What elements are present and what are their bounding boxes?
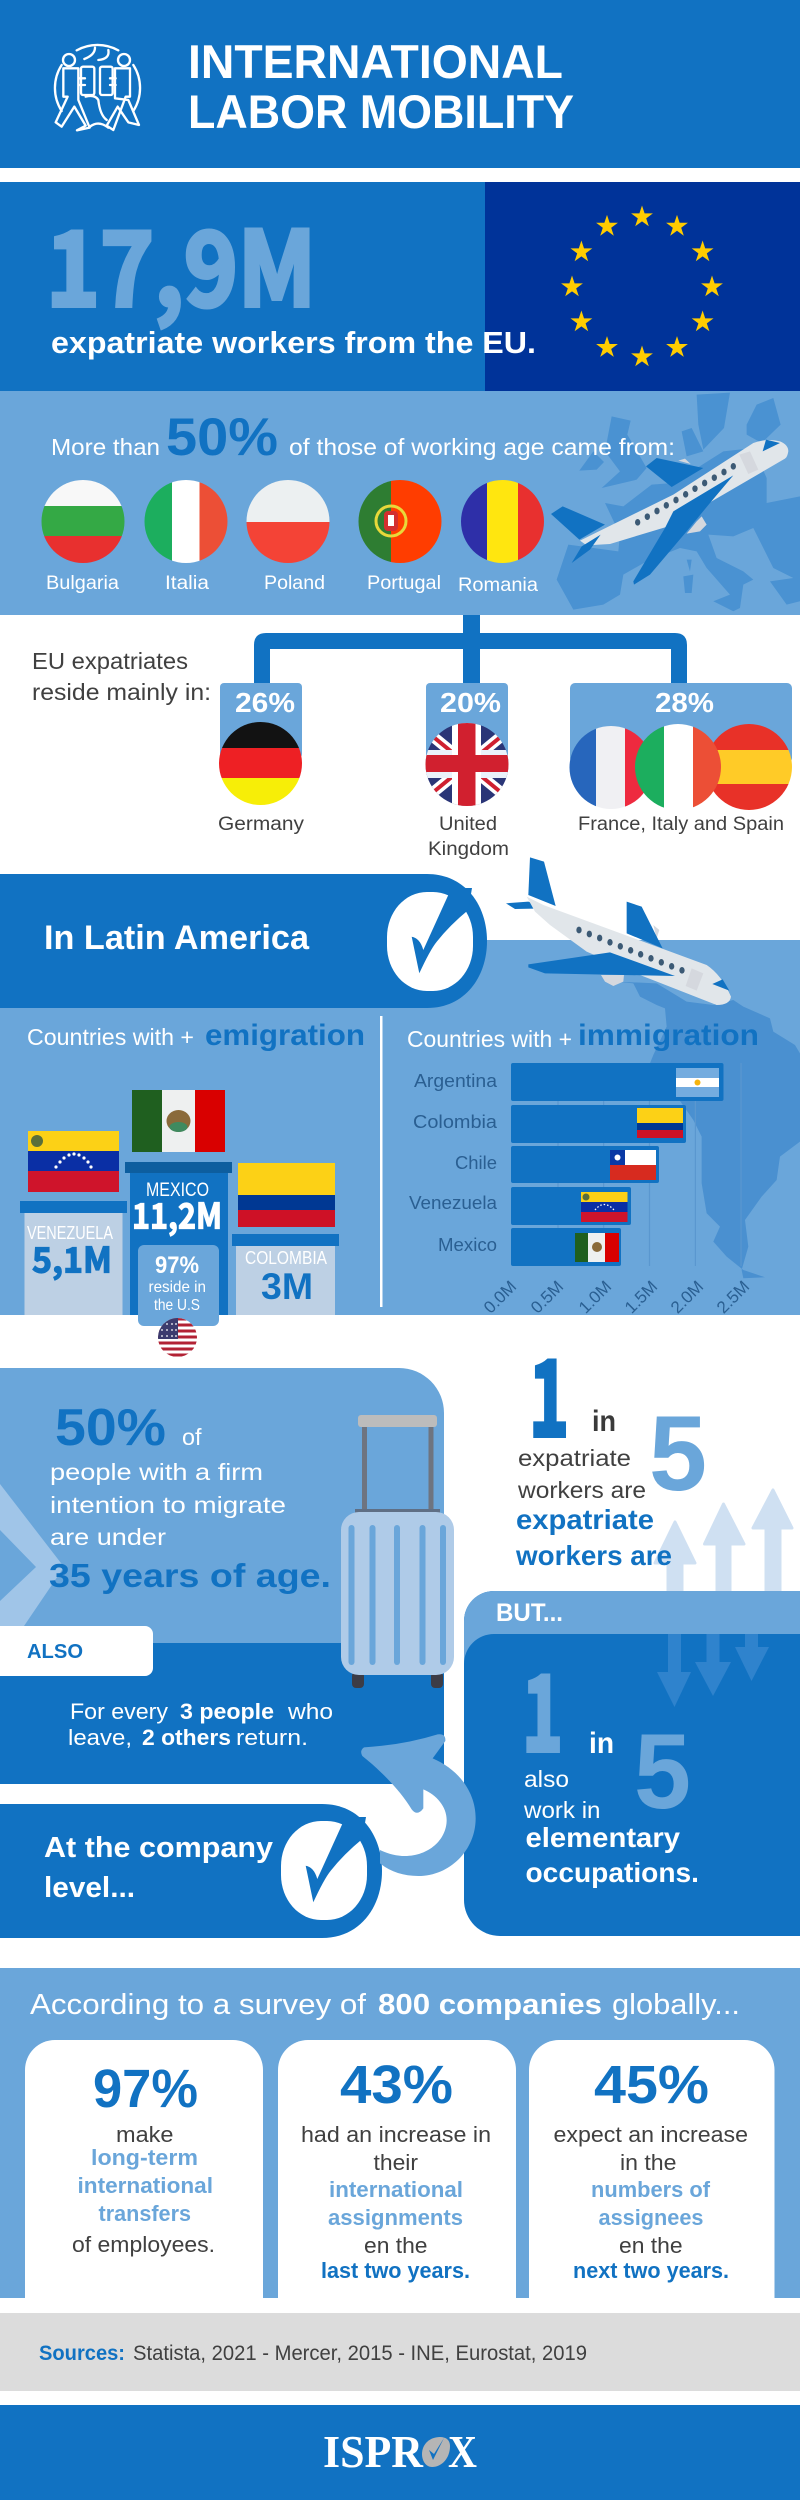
podium: Mexico: [125, 1090, 232, 1359]
icon: airplane taking off: [551, 440, 788, 585]
Germany 26%: 26%: [235, 687, 295, 718]
podium: Mexico: 11,2M: [132, 1188, 222, 1240]
country labels: Poland: [264, 573, 325, 594]
heading: immigration: Countries with +: [407, 1026, 572, 1052]
card: 97%: make: [116, 2122, 174, 2147]
Germany 26%: Germany: [218, 814, 305, 835]
icon: check mark: [387, 888, 473, 991]
icon: suitcase: [341, 1415, 454, 1688]
flag: Romania: [460, 480, 545, 564]
bar labels: Argentina: [414, 1071, 498, 1091]
card: 97%: international: [78, 2173, 213, 2198]
axis labels: 0.5M: [527, 1277, 567, 1317]
survey heading: According to a survey of: [30, 1989, 367, 2021]
card: 45%: expect an increase: [554, 2122, 748, 2147]
flag: Portugal: [358, 480, 443, 564]
text: every 3 people: return.: [236, 1725, 308, 1750]
stat: 1 in 5 expatriate workers: expatriate: [516, 1504, 654, 1535]
axis labels: 1.5M: [621, 1277, 661, 1317]
flag: Bulgaria: [41, 480, 125, 564]
podium: Mexico: 97%: [155, 1252, 199, 1279]
text: 50% of people: intention to migrate: [50, 1492, 286, 1518]
text: 50% of people: people with a firm: [50, 1459, 263, 1485]
text: every 3 people: For every: [70, 1699, 168, 1724]
survey heading: [30, 1989, 740, 2021]
title: LABOR MOBILITY: [188, 85, 574, 138]
icon: check mark: [281, 1817, 367, 1920]
card: 97%: transfers: [98, 2201, 191, 2226]
footer with logo: [0, 2405, 800, 2500]
flag: Poland: [246, 480, 330, 564]
axis labels: 1.0M: [575, 1277, 615, 1317]
flag: United States: [158, 1318, 197, 1356]
intro sentence: [51, 408, 675, 467]
stat: 1 in 5 expatriate workers: 5: [649, 1393, 707, 1513]
heading: immigration: immigration: [578, 1019, 759, 1052]
heading: emigration: [27, 1019, 365, 1052]
bar labels: Venezuela: [409, 1193, 498, 1213]
banner: At the company level: At the company: [44, 1832, 273, 1864]
panel: EU expatriate headline: [0, 182, 800, 391]
sources bar: [0, 2313, 800, 2391]
podium: Colombia: 3M: [261, 1266, 313, 1307]
panel: Latin America: [0, 857, 800, 1359]
flag: Italy: [144, 480, 228, 564]
header panel: [0, 0, 800, 168]
France, Italy and Spain 28%: 28%: [655, 687, 714, 718]
France, Italy and Spain 28%: France, Italy and Spain: [578, 814, 784, 835]
icon: up arrows: [655, 1490, 792, 1592]
podium: Mexico: the U.S: [154, 1297, 200, 1314]
card: 45%: 45%: [594, 2055, 709, 2115]
card: 45%: in the: [620, 2150, 676, 2175]
podium: Colombia: COLOMBIA: [245, 1248, 327, 1268]
panel: BUT 1 in 5 elementary occupations: also: [524, 1766, 569, 1792]
bar chart: immigration: [409, 1063, 753, 1317]
country labels: [46, 573, 538, 596]
icon: two workers with globe: [55, 45, 140, 130]
text: every 3 people: 2 others: [142, 1725, 231, 1750]
banner: In Latin America: In Latin America: [44, 919, 310, 957]
text: 50% of people: 50%: [55, 1399, 166, 1457]
survey heading: globally...: [612, 1989, 740, 2021]
podium: Venezuela: [20, 1131, 127, 1315]
intro sentence: 50%: [166, 408, 278, 467]
sources bar: Sources:: [39, 2342, 125, 2365]
card: 97%: 97%: [93, 2059, 198, 2119]
card: 45%: next two years.: [573, 2258, 729, 2283]
heading: immigration: [407, 1019, 759, 1052]
text: every 3 people: leave,: [68, 1725, 132, 1750]
stat: 1 in 5 expatriate workers: in: [592, 1405, 616, 1438]
bar: Chile: [511, 1146, 659, 1183]
panel: BUT 1 in 5 elementary occupations: in: [589, 1727, 614, 1760]
podium: Mexico: MEXICO: [146, 1180, 209, 1201]
card: 45%: en the: [619, 2233, 683, 2258]
country labels: Italia: [165, 573, 209, 594]
card: 43%: had an increase in: [301, 2122, 491, 2147]
banner: In Latin America: [0, 874, 487, 1008]
country labels: Bulgaria: [46, 573, 119, 594]
podium: Venezuela: 5,1M: [32, 1232, 112, 1284]
axis labels: [480, 1277, 753, 1317]
axis labels: 2.0M: [667, 1277, 707, 1317]
text: every 3 people: [68, 1699, 333, 1750]
card: 43%: international: [329, 2177, 463, 2202]
bar labels: Mexico: [438, 1235, 497, 1255]
card: 43%: en the: [364, 2233, 428, 2258]
axis labels: 2.5M: [713, 1277, 753, 1317]
United Kingdom 20%: United: [439, 814, 497, 835]
card: 97%: long-term: [91, 2145, 198, 2170]
icon: airplane landing: [506, 857, 731, 1005]
bar: Venezuela: [511, 1187, 631, 1225]
panel: BUT 1 in 5 elementary occupations: elementary: [526, 1822, 680, 1853]
card: 97%: of employees.: [72, 2232, 215, 2257]
text: 50% of people: 35 years of age.: [49, 1557, 331, 1594]
banner: At the company level: level...: [44, 1872, 135, 1904]
panel: BUT 1 in 5 elementary occupations: occupations.: [526, 1857, 699, 1888]
card: 43%: assignments: [328, 2205, 463, 2230]
big number 17,9M: 17,9M: [46, 187, 316, 336]
map of Europe: [557, 393, 800, 611]
heading band: BUT: BUT...: [496, 1599, 563, 1627]
heading: emigration: emigration: [205, 1019, 365, 1052]
text: every 3 people: 3 people: [180, 1699, 274, 1724]
card: 45%: [529, 2040, 774, 2298]
Germany 26%: [218, 683, 305, 835]
tag: ALSO: [0, 1626, 153, 1676]
card: 45%: assignees: [598, 2205, 704, 2230]
text: 50% of people: [49, 1399, 331, 1594]
text: 50% of people: of: [182, 1424, 202, 1450]
survey heading: 800 companies: [378, 1989, 602, 2021]
text: 50% of people: are under: [50, 1524, 166, 1550]
text: EU expatriates reside: reside mainly in:: [32, 679, 211, 705]
bar: Argentina: [511, 1063, 724, 1101]
podium: Colombia: [232, 1163, 339, 1315]
card: 45%: numbers of: [591, 2177, 711, 2202]
panel: BUT 1 in 5 elementary occupations: 5: [634, 1711, 691, 1831]
panel: where EU expatriates reside: [32, 615, 795, 860]
intro sentence: of those of working age came from:: [289, 434, 675, 460]
heading band: BUT: [464, 1591, 800, 1664]
text: every 3 people: who: [287, 1699, 333, 1724]
panel: 50% under 35 years: [0, 1368, 454, 1784]
stat: 1 in 5 expatriate workers: 1: [529, 1315, 569, 1467]
heading: emigration: Countries with +: [27, 1024, 194, 1050]
panel: BUT 1 in 5 elementary occupations: [464, 1591, 800, 1936]
intro sentence: More than: [51, 434, 160, 460]
podium: Venezuela: VENEZUELA: [27, 1223, 113, 1243]
bar labels: Colombia: [413, 1112, 498, 1132]
logo: ISPROX: ISPR: [323, 2426, 424, 2477]
card: 97%: [25, 2040, 263, 2298]
panel: countries of origin: [0, 391, 800, 615]
bar labels: [409, 1071, 498, 1255]
text: EU expatriates reside: [32, 648, 211, 705]
country labels: Portugal: [367, 573, 441, 594]
United Kingdom 20%: Kingdom: [428, 839, 509, 860]
panel: BUT 1 in 5 elementary occupations: 1: [522, 1630, 563, 1782]
map of Latin America: [617, 982, 800, 1278]
bar labels: Chile: [455, 1153, 497, 1173]
stat: 1 in 5 expatriate workers: workers are: [517, 1477, 646, 1503]
sources bar: Statista, 2021 - Mercer, 2015 - INE, Eurostat, 2019: [133, 2342, 587, 2365]
icon: down arrows: [657, 1634, 769, 1707]
country labels: Romania: [458, 575, 538, 596]
logo: ISPROX: [323, 2426, 477, 2477]
card: 43%: last two years.: [321, 2258, 470, 2283]
United Kingdom 20%: [425, 683, 509, 860]
United Kingdom 20%: 20%: [440, 687, 501, 718]
tag: ALSO: ALSO: [27, 1641, 83, 1663]
card: 43%: [278, 2040, 516, 2298]
card: 43%: their: [374, 2150, 418, 2175]
stat: 1 in 5 expatriate workers: [515, 1315, 792, 1592]
title: INTERNATIONAL: [188, 35, 563, 88]
arrow: curved return: [361, 1734, 476, 1876]
bar: Colombia: [511, 1105, 686, 1143]
subtitle: expatriate workers from the EU.: [51, 325, 536, 360]
stat: 1 in 5 expatriate workers: workers are: [515, 1540, 672, 1571]
panel: survey of 800 companies: [0, 1968, 800, 2298]
podium: Mexico: reside in: [148, 1279, 206, 1296]
title: [188, 35, 574, 138]
card: 43%: 43%: [340, 2055, 453, 2115]
bar: Mexico: [511, 1228, 621, 1266]
panel: BUT 1 in 5 elementary occupations: work in: [523, 1797, 600, 1823]
France, Italy and Spain 28%: [568, 683, 795, 835]
text: EU expatriates reside: EU expatriates: [32, 648, 188, 674]
connector tree: [254, 615, 687, 683]
EU flag: [485, 182, 800, 391]
axis labels: 0.0M: [480, 1277, 520, 1317]
banner: At the company level: [0, 1804, 382, 1938]
decorative chevron: [0, 1484, 64, 1626]
logo: ISPROX: X: [448, 2426, 477, 2477]
stat: 1 in 5 expatriate workers: expatriate: [518, 1445, 631, 1471]
